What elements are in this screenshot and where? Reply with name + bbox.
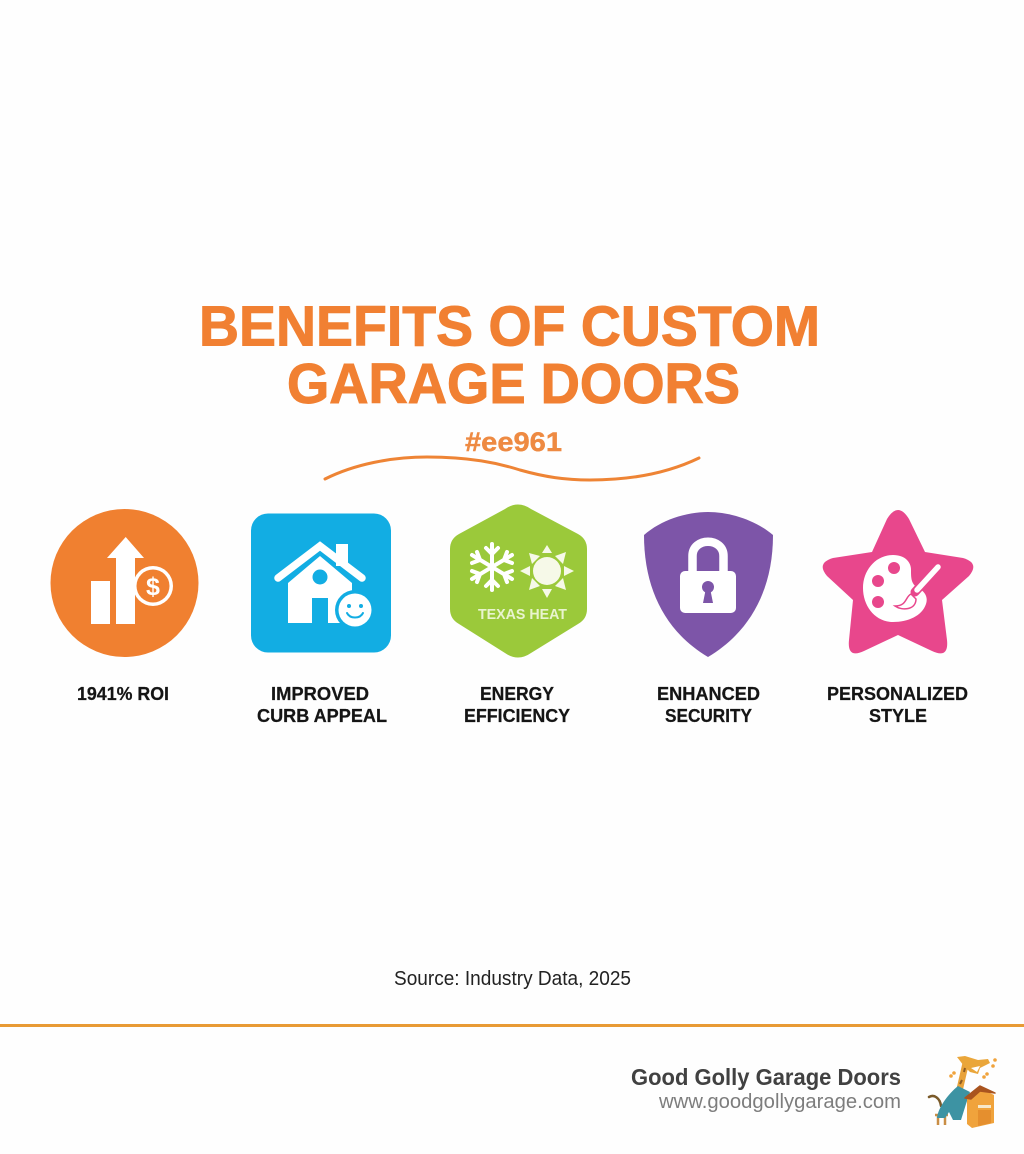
jacket body <box>937 1086 970 1120</box>
garage walls <box>967 1088 994 1128</box>
wavy underline <box>325 457 699 480</box>
icon: sun <box>520 545 574 598</box>
icon: energy hexagon: TEXAS HEAT <box>478 606 567 623</box>
stool <box>935 1115 948 1125</box>
garage roof <box>965 1086 995 1099</box>
label: personalized style: PERSONALIZED <box>827 684 968 704</box>
icon: snowflake <box>472 544 512 590</box>
subtitle colour code: #ee961 <box>465 427 562 457</box>
label: energy efficiency: ENERGY <box>480 684 554 704</box>
icon: curb appeal house <box>251 514 391 652</box>
footer divider <box>0 1024 1024 1027</box>
label: enhanced security: ENHANCED <box>657 684 760 704</box>
label: ROI: 1941% ROI <box>77 684 169 704</box>
icon: ROI circle: $ <box>146 573 160 601</box>
icon: security shield <box>644 512 773 657</box>
source note: Source: Industry Data, 2025 <box>394 968 631 990</box>
label: personalized style: STYLE <box>869 706 927 726</box>
title <box>199 294 820 416</box>
head <box>957 1056 990 1074</box>
icon: ROI circle <box>50 509 198 657</box>
logo: giraffe with garage <box>929 1056 997 1128</box>
icon: personalized style star <box>823 510 973 653</box>
label: personalized style <box>827 684 968 726</box>
label: enhanced security: SECURITY <box>665 706 752 726</box>
label: curb appeal <box>257 684 387 726</box>
music notes <box>949 1058 997 1079</box>
footer url: www.goodgollygarage.com <box>658 1091 901 1113</box>
label: energy efficiency: EFFICIENCY <box>464 706 570 726</box>
label: curb appeal: CURB APPEAL <box>257 706 387 726</box>
label: curb appeal: IMPROVED <box>271 684 369 704</box>
title: BENEFITS OF CUSTOM <box>199 294 820 358</box>
tail <box>929 1096 941 1106</box>
label: energy efficiency <box>464 684 570 726</box>
icon: energy hexagon <box>450 504 587 658</box>
label: enhanced security <box>657 684 760 726</box>
title: GARAGE DOORS <box>287 352 740 416</box>
footer brand name: Good Golly Garage Doors <box>631 1064 901 1090</box>
neck <box>960 1062 966 1088</box>
